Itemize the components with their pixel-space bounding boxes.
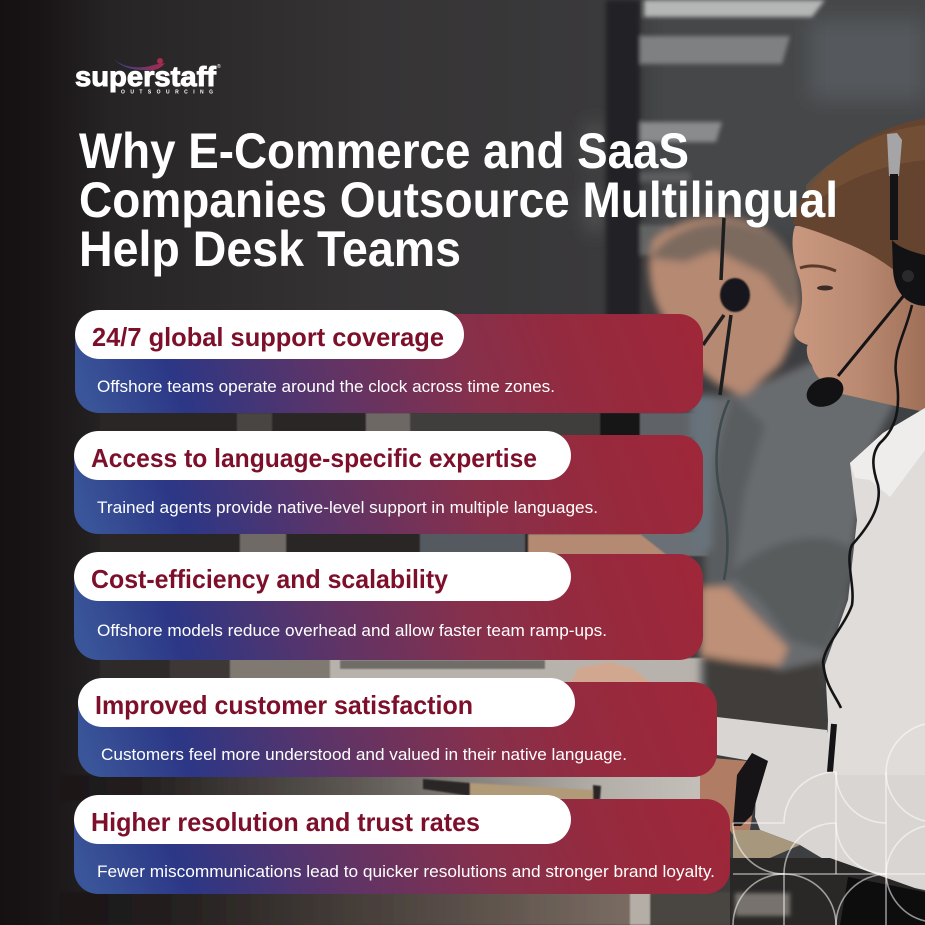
panel: improved customer satisfaction: [78, 678, 717, 777]
panel: 24/7 global support coverage: 24/7 global support coverage: [92, 322, 444, 352]
decorative line pattern: [733, 724, 925, 925]
panel: 24/7 global support coverage: [75, 310, 703, 413]
woman in foreground: [700, 118, 925, 925]
panel: 24/7 global support coverage: Offshore teams operate around the clock across time zones.: [97, 377, 555, 396]
logo dot: [157, 58, 163, 64]
background: strips between cards: [60, 413, 750, 925]
panel: higher resolution and trust rates: [74, 795, 730, 894]
panel: access to language-specific expertise: Access to language-specific expertise: [91, 443, 537, 473]
logo wordmark: superstaff: [75, 61, 217, 92]
title: Companies Outsource Multilingual: [79, 172, 838, 228]
logo swoosh: [114, 59, 165, 71]
panel: higher resolution and trust rates: Higher resolution and trust rates: [91, 807, 480, 837]
panel: cost-efficiency and scalability: Cost-efficiency and scalability: [91, 564, 449, 594]
panel: cost-efficiency and scalability: [74, 552, 703, 660]
panel: improved customer satisfaction: Improved customer satisfaction: [95, 690, 473, 720]
panel: access to language-specific expertise: Trained agents provide native-level support in multiple languages.: [97, 498, 598, 517]
title: Why E-Commerce and SaaS: [79, 123, 689, 179]
logo: superstaff outsourcing: [75, 58, 221, 96]
logo tagline: OUTSOURCING: [121, 90, 213, 96]
title: [79, 123, 838, 277]
background: office window: [588, 0, 925, 240]
woman: headset: [887, 133, 902, 176]
logo registered mark: ®: [217, 63, 221, 70]
woman: white shirt: [825, 408, 925, 890]
background: ceiling lights: [606, 0, 825, 345]
background: pen on desk: [423, 779, 601, 800]
man in background: [649, 217, 897, 730]
background: hands on desk: [528, 534, 668, 556]
panel: cost-efficiency and scalability: Offshore models reduce overhead and allow faster team ramp-ups.: [97, 621, 607, 640]
panel: higher resolution and trust rates: Fewer miscommunications lead to quicker resolutions and stronger brand loyalty.: [97, 862, 715, 881]
title: Help Desk Teams: [79, 221, 461, 277]
woman: sleeve: [717, 717, 925, 890]
woman: forearm: [700, 757, 762, 862]
panel: improved customer satisfaction: Customers feel more understood and valued in their native language.: [101, 745, 627, 764]
panel: access to language-specific expertise: [74, 431, 703, 534]
